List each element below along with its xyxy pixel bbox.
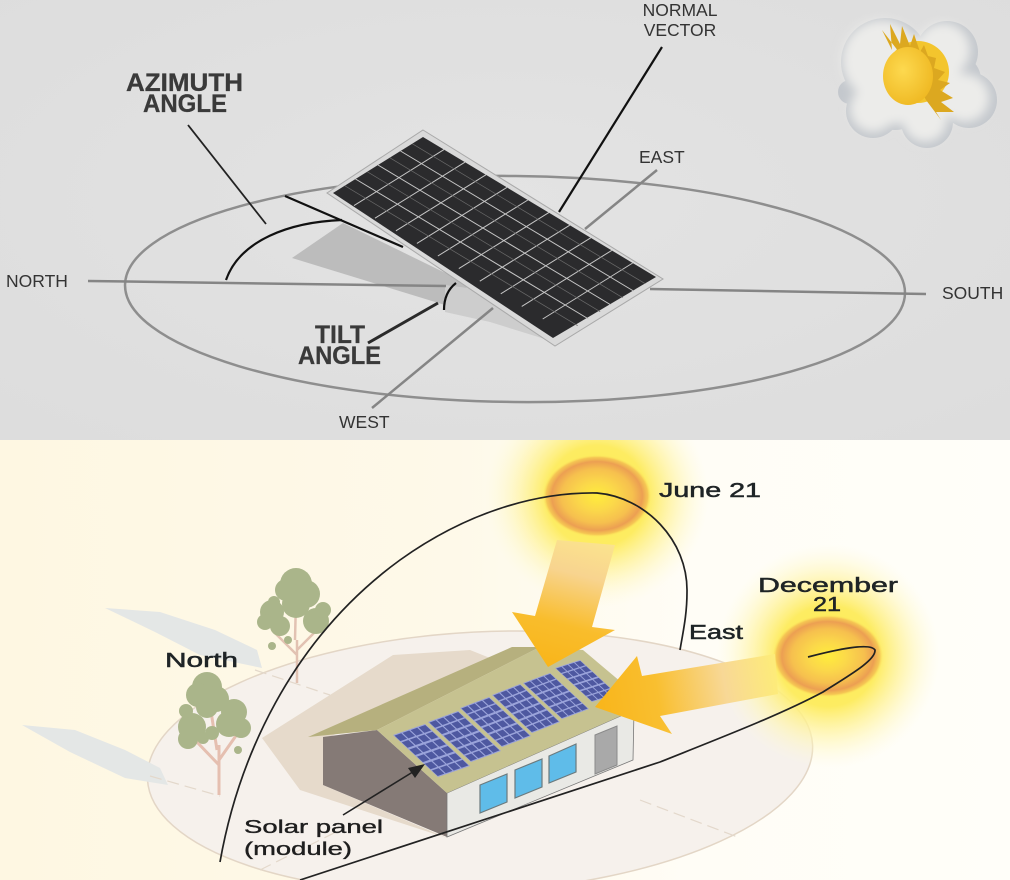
tilt pointer [368, 303, 438, 343]
label: normal vector: VECTOR [644, 20, 716, 40]
sun path: June [220, 493, 687, 862]
panel: azimuth and tilt diagram [0, 0, 1010, 440]
panel: seasonal sun path over house [0, 440, 938, 880]
front wall [447, 710, 634, 837]
north axis [88, 281, 446, 286]
house [308, 647, 634, 837]
tilt arc [444, 283, 456, 310]
label: December 21: December [758, 575, 899, 597]
door [595, 726, 617, 774]
arrow: June sunlight [512, 540, 615, 667]
label: Solar panel (module): (module) [244, 839, 352, 859]
tree: front [178, 672, 251, 795]
east axis [585, 170, 657, 229]
sun: June 21 [496, 440, 700, 598]
label: west: WEST [339, 412, 390, 432]
label: North: North [165, 650, 238, 672]
label: tilt angle: ANGLE [298, 342, 381, 370]
tree: rear [257, 568, 331, 683]
label: June 21: June 21 [659, 480, 761, 502]
label: north: NORTH [6, 271, 68, 291]
solar panels [393, 660, 617, 777]
normal vector line [559, 47, 662, 212]
label: normal vector: NORMAL [643, 0, 718, 20]
tree shadow lower [22, 725, 168, 785]
front roof slope [377, 647, 634, 793]
arrow: solar panel pointer [343, 764, 425, 815]
under-panel wedge [445, 285, 548, 340]
label: east: EAST [639, 147, 685, 167]
sun path: December [300, 647, 875, 880]
west axis [372, 308, 493, 408]
house shadow [262, 650, 495, 838]
label: tilt angle: TILT [315, 321, 365, 349]
label: Solar panel (module): Solar panel [244, 817, 383, 837]
ground ellipse [141, 615, 819, 880]
tree shadow upper [105, 608, 262, 668]
solar panel [327, 130, 663, 346]
label: December 21: 21 [813, 594, 841, 616]
label: south: SOUTH [942, 283, 1003, 303]
icon: sun behind cloud [838, 18, 997, 148]
panel shadow [292, 223, 470, 305]
azimuth pointer [188, 125, 266, 224]
azimuth arc [226, 220, 342, 280]
horizon circle [124, 172, 906, 406]
label: East: East [689, 622, 744, 644]
label: azimuth angle: AZIMUTH [126, 69, 243, 97]
back roof slope [308, 647, 540, 737]
sun: December 21 [725, 553, 932, 759]
windows [480, 744, 576, 813]
arrow: December sunlight [595, 654, 778, 734]
gable wall [323, 730, 447, 837]
ground dashed lines [150, 670, 740, 870]
azimuth reference line [285, 196, 403, 247]
south axis [650, 289, 926, 294]
label: azimuth angle: ANGLE [143, 90, 227, 118]
